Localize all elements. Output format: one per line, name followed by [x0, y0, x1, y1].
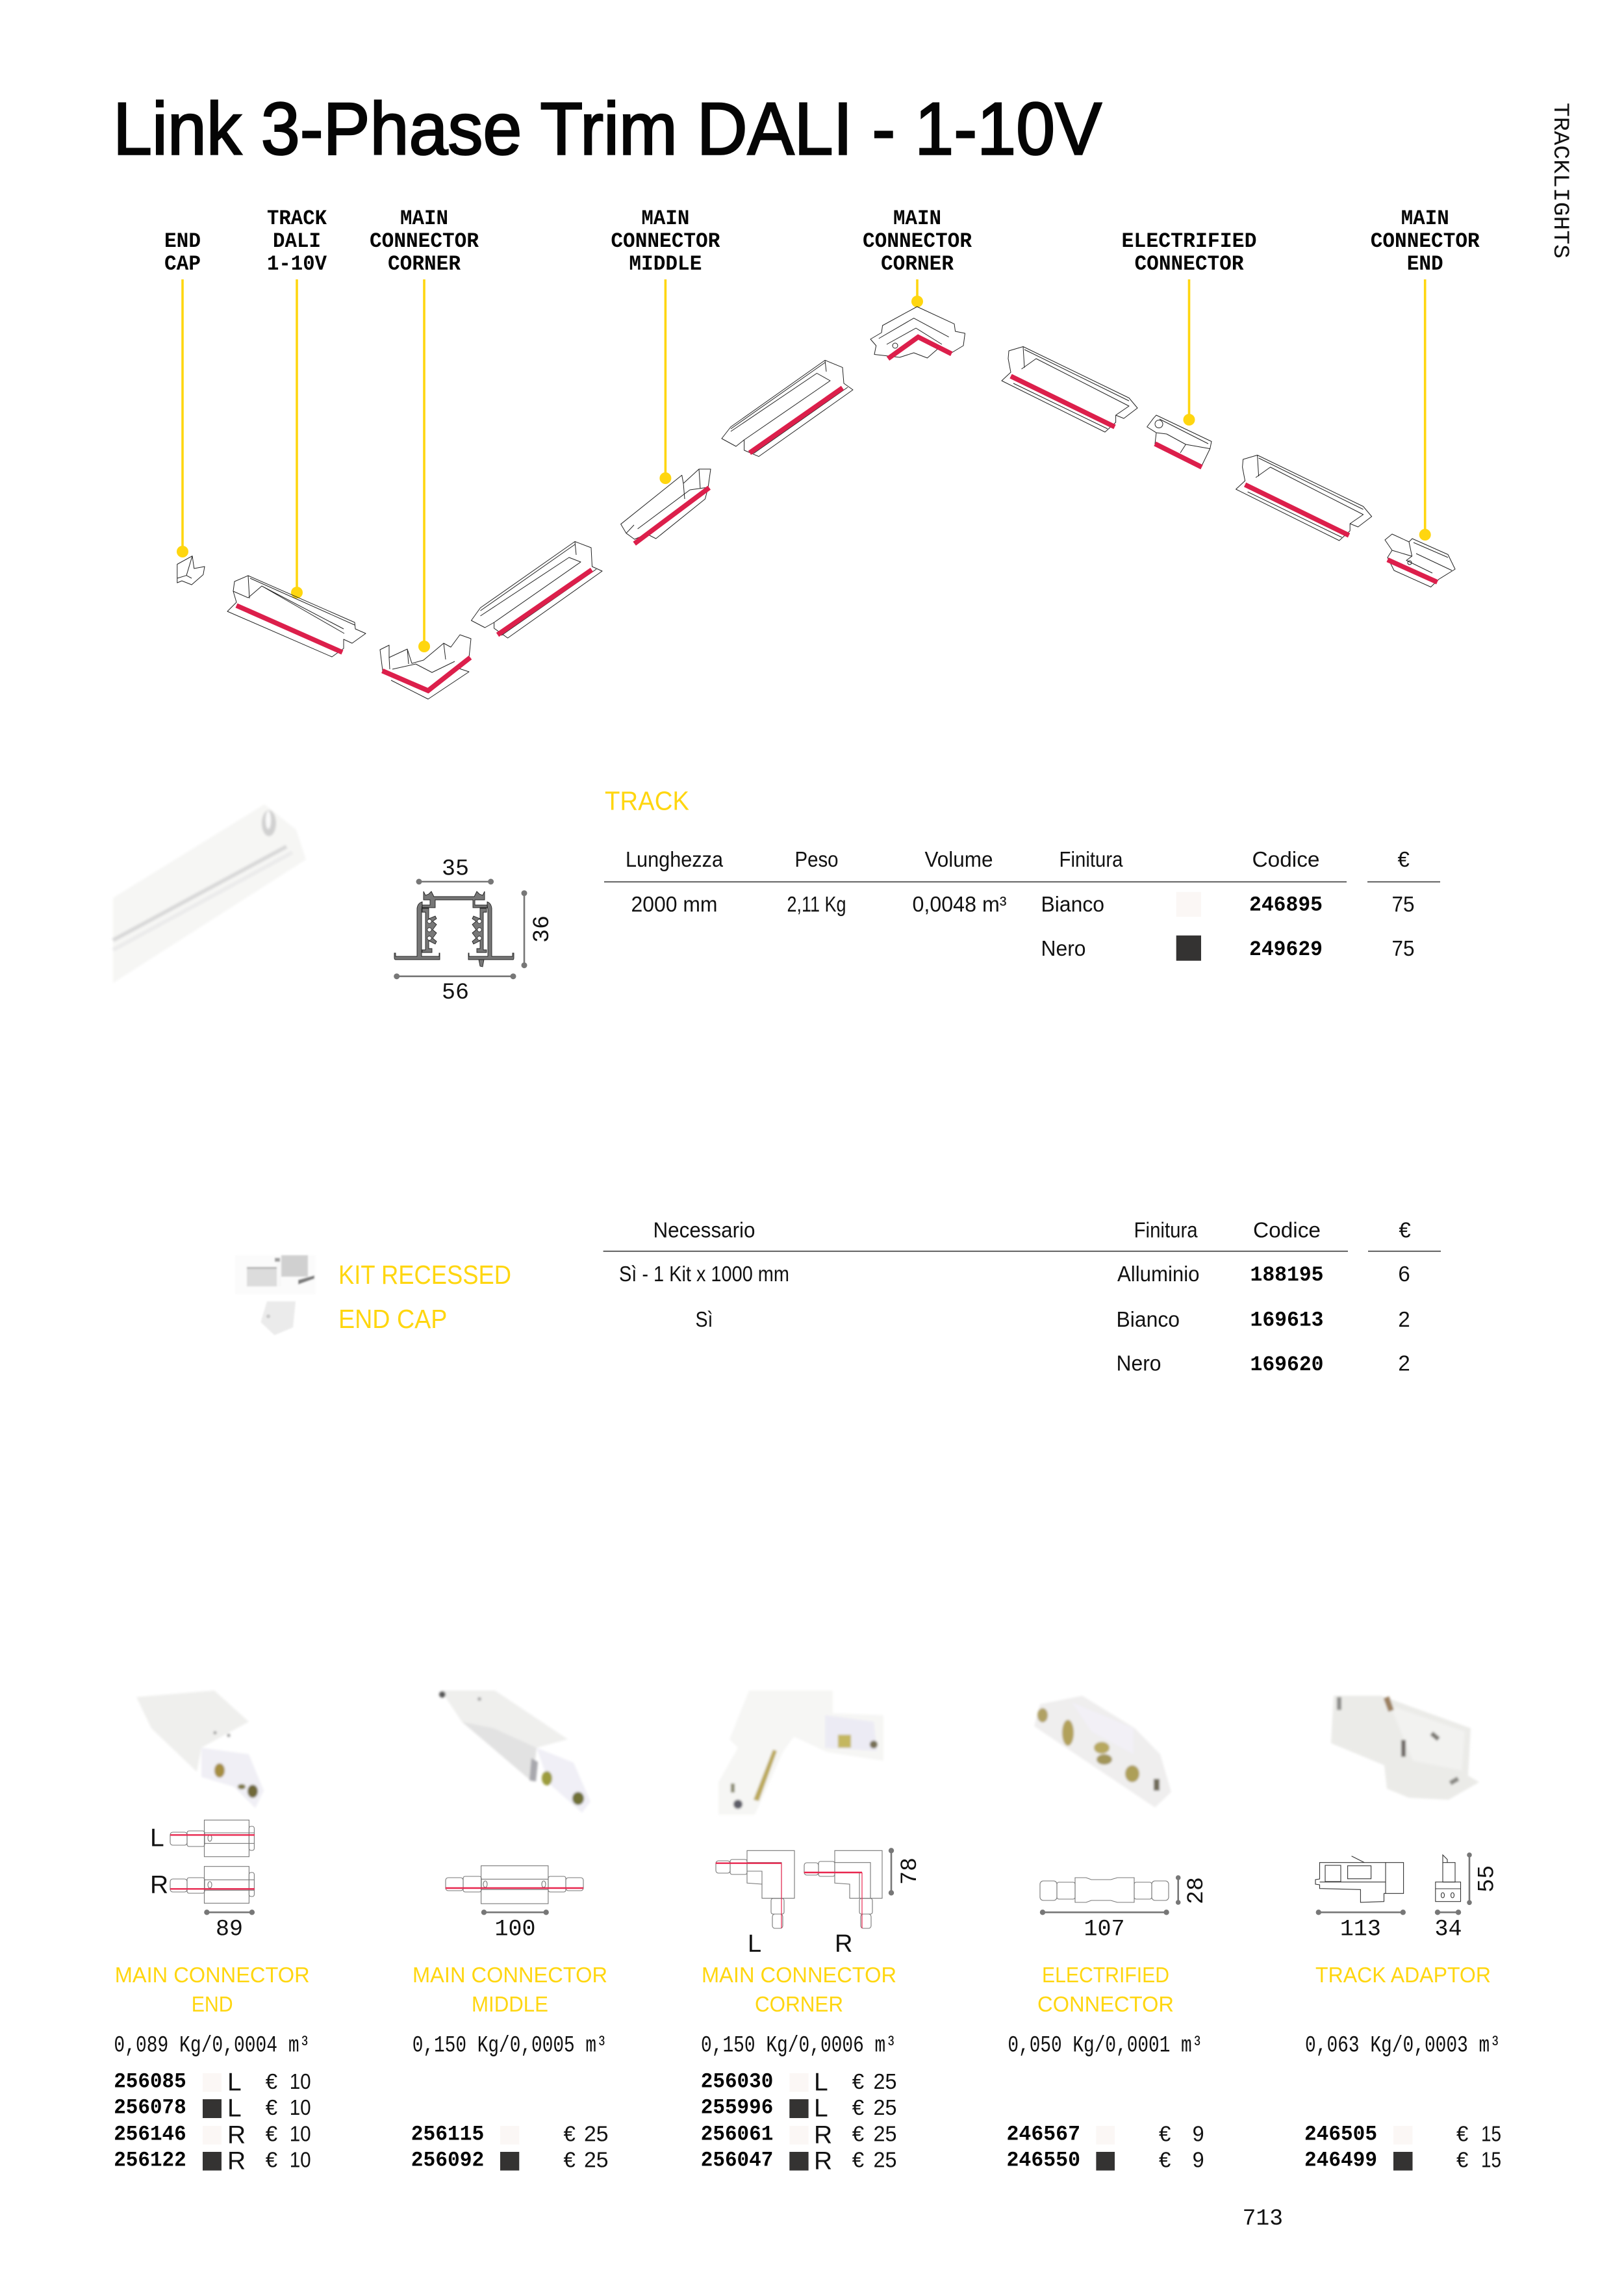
- price list: main connector middle: €: [564, 2148, 576, 2172]
- price list: track adaptor: [1304, 2122, 1501, 2172]
- table: track specifications: Nero: [1041, 936, 1086, 960]
- price list: main connector end: 10: [290, 2069, 311, 2093]
- price list: electrified connector: €: [1159, 2122, 1171, 2146]
- callout: end cap: CAP: [164, 252, 201, 276]
- table: track specifications: 75: [1391, 892, 1415, 916]
- drawing: track adaptor side and front views: 55: [1475, 1865, 1501, 1893]
- table: track specifications: 249629: [1249, 938, 1323, 962]
- callout: track dali 1-10V: DALI: [273, 229, 321, 253]
- specs: weight and volume: 0,063 Kg/0,0003 m³: [1305, 2032, 1501, 2058]
- heading: track: TRACK: [605, 786, 689, 816]
- specs: weight and volume: 0,150 Kg/0,0006 m³: [701, 2032, 896, 2058]
- heading: main connector end: END: [192, 1992, 233, 2016]
- heading: main connector corner: MAIN CONNECTOR: [702, 1963, 896, 1987]
- page number: 713: [1243, 2206, 1283, 2232]
- table: accessories: Sì - 1 Kit x 1000 mm: [619, 1262, 789, 1286]
- price list: main connector corner: €: [852, 2095, 864, 2119]
- price list: main connector corner: 255996: [701, 2096, 773, 2120]
- icon: track segment 3: [722, 360, 853, 457]
- price list: main connector corner: L: [814, 2095, 828, 2123]
- drawing: L and R corner profiles: R: [835, 1930, 852, 1958]
- table: track specifications: [604, 847, 1440, 962]
- icon: track segment 2: [472, 542, 602, 638]
- callout: end cap: [164, 229, 201, 557]
- icon: main connector corner line art 2: [870, 307, 965, 359]
- drawing: track adaptor side and front views: 34: [1434, 1916, 1462, 1942]
- price list: track adaptor: 246505: [1304, 2122, 1377, 2146]
- callout: main connector end: END: [1407, 252, 1443, 276]
- price list: main connector corner: R: [814, 2121, 832, 2149]
- panel: main connector corner: [701, 1691, 923, 2175]
- drawing: L and R profiles: R: [150, 1871, 168, 1898]
- heading: electrified connector: [1037, 1963, 1174, 2016]
- table: accessories: Necessario: [653, 1218, 755, 1242]
- callout: track dali 1-10V: 1-10V: [267, 252, 327, 276]
- callout: main connector corner: CONNECTOR: [370, 229, 479, 253]
- table: accessories: 2: [1398, 1307, 1410, 1331]
- price list: main connector end: 256085: [114, 2070, 186, 2094]
- price list: main connector middle: 25: [584, 2148, 608, 2172]
- price list: main connector corner: 256030: [701, 2070, 773, 2094]
- price list: main connector corner: €: [852, 2122, 864, 2146]
- callout: main connector corner: CORNER: [388, 252, 461, 276]
- photo: end cap: [260, 1301, 296, 1335]
- price list: main connector end: R: [227, 2147, 246, 2175]
- drawing: track cross section with dimensions: 36: [529, 915, 555, 943]
- price list: main connector corner: 25: [873, 2148, 896, 2172]
- specs: weight and volume: 0,050 Kg/0,0001 m³: [1008, 2032, 1202, 2058]
- drawing: L and R corner profiles: 78: [897, 1858, 923, 1885]
- price list: main connector corner: R: [814, 2147, 832, 2175]
- price list: main connector middle: 256115: [411, 2122, 484, 2146]
- table: accessories: Finitura: [1134, 1218, 1198, 1242]
- price list: electrified connector: 9: [1193, 2148, 1204, 2172]
- icon: track segment 1: [227, 576, 366, 657]
- heading: main connector corner: [702, 1963, 896, 2016]
- callout: electrified connector: ELECTRIFIED: [1121, 229, 1256, 253]
- table: accessories: Bianco: [1116, 1307, 1180, 1331]
- price list: electrified connector: 246550: [1007, 2148, 1080, 2172]
- icon: main connector corner line art: [380, 635, 471, 699]
- callout: main connector middle: MIDDLE: [629, 252, 702, 276]
- side tab: tracklights: TRACKLIGHTS: [1547, 103, 1572, 259]
- panel: main connector end: [114, 1691, 311, 2175]
- callout: main connector end: [1371, 207, 1480, 541]
- price list: main connector end: 256146: [114, 2122, 186, 2146]
- callout: electrified connector: CONNECTOR: [1134, 252, 1244, 276]
- callout: main connector corner 2: CONNECTOR: [863, 229, 972, 253]
- drawing: L and R corner profiles: L: [748, 1930, 761, 1958]
- callout: main connector corner: [370, 207, 479, 652]
- photo: main connector middle: [439, 1691, 590, 1813]
- callout: track dali 1-10V: TRACK: [267, 207, 327, 231]
- icon: track segment 4: [1002, 347, 1137, 432]
- panel: accessories: [235, 1218, 1441, 1377]
- callout: main connector middle: CONNECTOR: [611, 229, 720, 253]
- price list: main connector middle: €: [564, 2122, 576, 2146]
- table: track specifications: Bianco: [1041, 892, 1104, 916]
- table: accessories: Sì: [695, 1307, 713, 1331]
- callout: main connector corner: MAIN: [400, 207, 448, 231]
- table: track specifications: Codice: [1252, 847, 1320, 871]
- price list: main connector corner: 25: [873, 2122, 896, 2146]
- panel: track: [113, 786, 1440, 1006]
- drawing: track cross section with dimensions: 56: [442, 980, 469, 1006]
- table: accessories: [603, 1218, 1441, 1377]
- price list: main connector end: L: [227, 2095, 242, 2123]
- price list: main connector middle: [411, 2122, 608, 2172]
- heading: electrified connector: CONNECTOR: [1037, 1992, 1174, 2016]
- callout: track dali 1-10V: [267, 207, 327, 598]
- drawing: L and R profiles: [150, 1820, 255, 1942]
- price list: track adaptor: 15: [1481, 2148, 1501, 2172]
- table: accessories: 169613: [1250, 1309, 1324, 1333]
- drawing: electrified connector profile: 107: [1084, 1916, 1125, 1942]
- photo: kit recessed: [235, 1255, 316, 1294]
- callout: main connector middle: MAIN: [641, 207, 689, 231]
- price list: main connector end: 10: [290, 2095, 311, 2119]
- heading: main connector middle: MIDDLE: [472, 1992, 548, 2016]
- drawing: track cross section with dimensions: 35: [442, 856, 469, 882]
- table: track specifications: Lunghezza: [626, 847, 724, 871]
- heading: end cap: END CAP: [338, 1304, 447, 1334]
- price list: electrified connector: [1007, 2122, 1204, 2172]
- photo: main connector end: [136, 1691, 264, 1808]
- drawing: track adaptor side and front views: [1315, 1852, 1501, 1942]
- icon: main connector end line art: [1385, 534, 1455, 587]
- price list: electrified connector: €: [1159, 2148, 1171, 2172]
- price list: track adaptor: 15: [1481, 2122, 1501, 2146]
- price list: main connector corner: €: [852, 2069, 864, 2093]
- drawing: L and R corner profiles: [716, 1848, 923, 1958]
- table: accessories: 188195: [1250, 1263, 1324, 1287]
- table: accessories: €: [1399, 1218, 1411, 1242]
- price list: main connector end: [114, 2069, 311, 2175]
- price list: track adaptor: 246499: [1304, 2148, 1377, 2172]
- table: accessories: 6: [1398, 1262, 1410, 1286]
- heading: main connector end: [115, 1963, 310, 2016]
- price list: main connector corner: €: [852, 2148, 864, 2172]
- callout: main connector corner 2: MAIN: [893, 207, 941, 231]
- price list: main connector corner: 25: [873, 2095, 896, 2119]
- price list: electrified connector: 9: [1193, 2122, 1204, 2146]
- title: Link 3-Phase Trim DALI - 1-10V: [113, 88, 1102, 170]
- price list: main connector corner: [701, 2069, 896, 2175]
- panel: main connector middle: [411, 1691, 608, 2172]
- price list: main connector middle: 25: [584, 2122, 608, 2146]
- table: track specifications: 75: [1391, 936, 1415, 960]
- callout: main connector corner 2: [863, 207, 972, 307]
- panel: electrified connector: [1007, 1696, 1210, 2172]
- table: track specifications: Peso: [795, 847, 838, 871]
- heading: main connector middle: [412, 1963, 607, 2016]
- table: track specifications: 2,11 Kg: [787, 892, 846, 916]
- price list: main connector end: 10: [290, 2122, 311, 2146]
- heading: main connector end: MAIN CONNECTOR: [115, 1963, 310, 1987]
- drawing: middle connector profile: [446, 1866, 583, 1942]
- exploded system diagram: [164, 207, 1480, 699]
- heading: kit recessed: KIT RECESSED: [338, 1260, 511, 1290]
- callout: main connector middle: [611, 207, 720, 484]
- table: track specifications: 0,0048 m³: [912, 892, 1007, 916]
- drawing: L and R profiles: L: [150, 1824, 164, 1852]
- callout: end cap: END: [164, 229, 201, 253]
- price list: main connector end: €: [266, 2069, 277, 2093]
- icon: electrified connector line art: [1147, 415, 1212, 468]
- heading: track adaptor: TRACK ADAPTOR: [1315, 1963, 1491, 1987]
- table: accessories: 169620: [1250, 1353, 1324, 1377]
- photo: track adaptor: [1331, 1696, 1479, 1800]
- price list: main connector end: R: [227, 2121, 246, 2149]
- heading: main connector middle: MAIN CONNECTOR: [412, 1963, 607, 1987]
- price list: main connector end: €: [266, 2095, 277, 2119]
- price list: main connector end: €: [266, 2122, 277, 2146]
- price list: main connector corner: 256061: [701, 2122, 773, 2146]
- price list: main connector end: €: [266, 2148, 277, 2172]
- panel: track adaptor: [1304, 1696, 1501, 2172]
- drawing: electrified connector profile: 28: [1184, 1877, 1210, 1904]
- icon: main connector middle line art: [621, 469, 711, 544]
- photo: track profile: [113, 804, 306, 983]
- table: track specifications: Finitura: [1059, 847, 1123, 871]
- icon: track segment 5: [1236, 455, 1372, 541]
- table: accessories: Codice: [1253, 1218, 1321, 1242]
- price list: main connector end: 256078: [114, 2096, 186, 2120]
- price list: main connector corner: L: [814, 2069, 828, 2097]
- table: track specifications: €: [1398, 847, 1410, 871]
- drawing: middle connector profile: 100: [494, 1916, 536, 1942]
- price list: main connector end: L: [227, 2069, 242, 2097]
- price list: main connector end: 256122: [114, 2148, 186, 2172]
- callout: electrified connector: [1121, 229, 1256, 426]
- price list: main connector end: 10: [290, 2148, 311, 2172]
- table: accessories: Alluminio: [1117, 1262, 1199, 1286]
- table: track specifications: 2000 mm: [631, 892, 717, 916]
- callout: main connector end: MAIN: [1401, 207, 1449, 231]
- drawing: track cross section with dimensions: [394, 856, 555, 1006]
- callout: main connector end: CONNECTOR: [1371, 229, 1480, 253]
- heading: main connector corner: CORNER: [755, 1992, 843, 2016]
- callout: main connector corner 2: CORNER: [881, 252, 954, 276]
- table: accessories: Nero: [1116, 1351, 1161, 1375]
- price list: main connector corner: 25: [873, 2069, 896, 2093]
- photo: main connector corner: [718, 1691, 883, 1815]
- photo: electrified connector: [1034, 1696, 1171, 1808]
- specs: weight and volume: 0,089 Kg/0,0004 m³: [114, 2032, 310, 2058]
- table: track specifications: Volume: [925, 847, 993, 871]
- specs: weight and volume: 0,150 Kg/0,0005 m³: [412, 2032, 607, 2058]
- price list: track adaptor: €: [1456, 2148, 1468, 2172]
- price list: main connector middle: 256092: [411, 2148, 484, 2172]
- price list: track adaptor: €: [1456, 2122, 1468, 2146]
- heading: electrified connector: ELECTRIFIED: [1042, 1963, 1169, 1987]
- drawing: track adaptor side and front views: 113: [1340, 1916, 1381, 1942]
- icon: end cap line art: [177, 556, 205, 585]
- price list: electrified connector: 246567: [1007, 2122, 1080, 2146]
- drawing: L and R profiles: 89: [216, 1916, 243, 1942]
- table: track specifications: 246895: [1249, 893, 1323, 917]
- price list: main connector corner: 256047: [701, 2148, 773, 2172]
- table: accessories: 2: [1398, 1351, 1410, 1375]
- drawing: electrified connector profile: [1040, 1875, 1210, 1942]
